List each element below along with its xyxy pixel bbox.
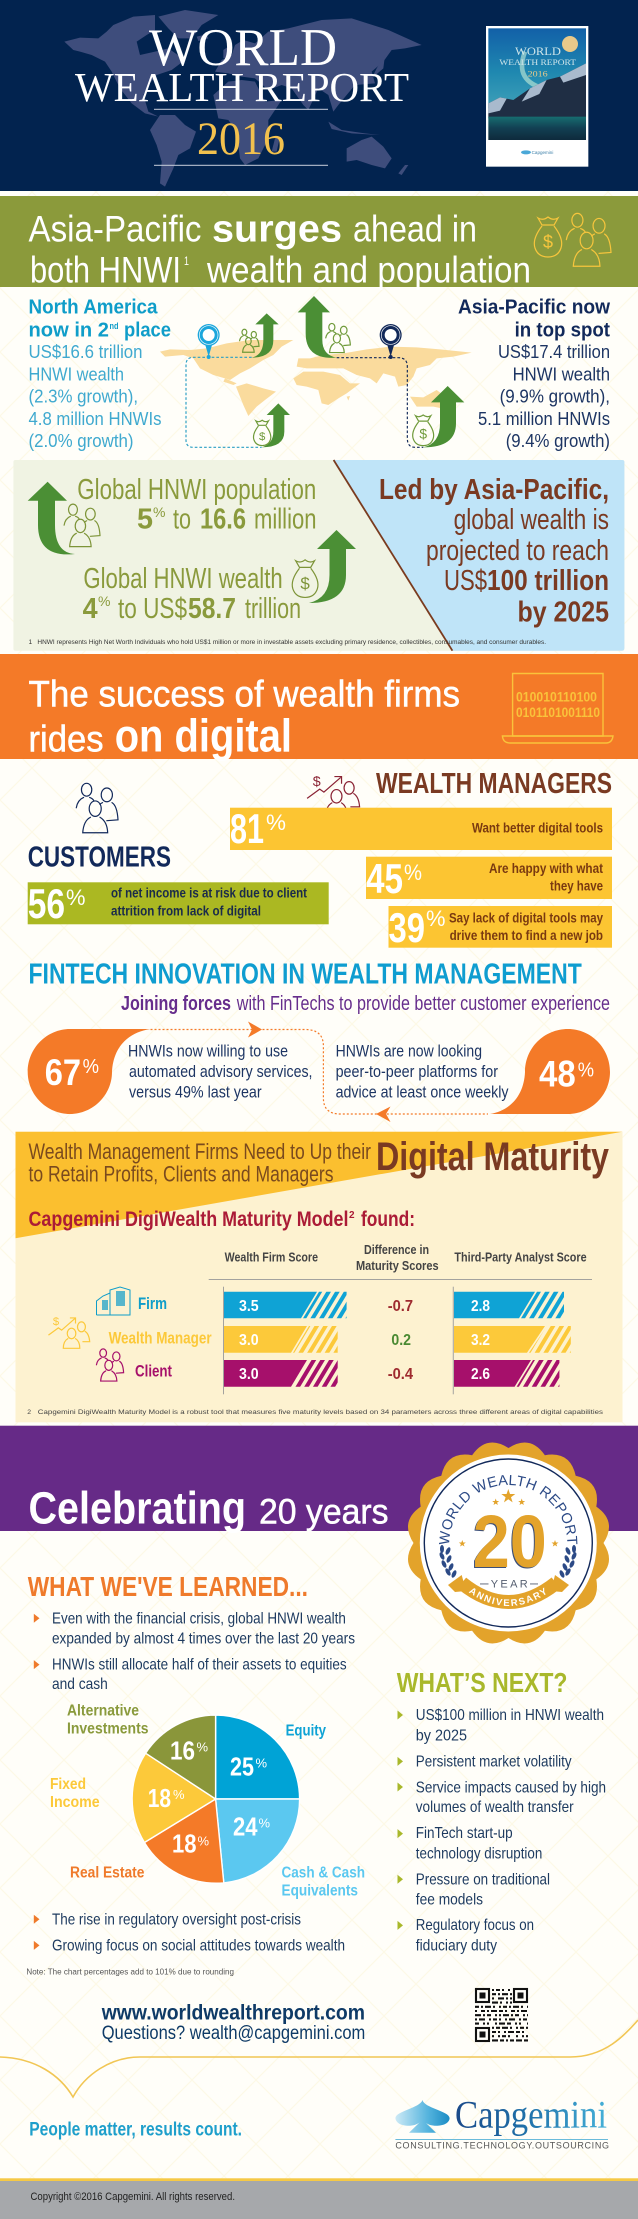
list: Pressure on traditional	[416, 1871, 550, 1888]
bullets bottom: The rise in regulatory oversight post-crisis	[52, 1912, 301, 1929]
score bars: analyst: 2.6	[471, 1366, 490, 1383]
global wealth stat: 58.7	[188, 593, 236, 625]
bullets top	[34, 1611, 355, 1693]
row labels: Client	[135, 1362, 172, 1381]
heading: Asia-Pacific surges	[28, 208, 531, 291]
heading: digital: The success of wealth firms	[28, 673, 460, 715]
Capgemini logo	[395, 2093, 609, 2150]
pie labels: Fixed	[50, 1776, 86, 1793]
ribbon: ANNIVERSARY	[468, 1588, 546, 1606]
pie labels	[50, 1703, 365, 1899]
list: Persistent market volatility	[416, 1753, 572, 1770]
icon: people	[64, 504, 100, 547]
icon: money and people	[534, 213, 611, 266]
North America text block: US$16.6 trillion	[28, 341, 142, 362]
footnote 1: 1	[28, 639, 32, 646]
title	[75, 19, 409, 166]
contact text	[101, 2001, 365, 2044]
dotted connector	[150, 1030, 488, 1114]
arrow left	[376, 1106, 390, 1122]
global wealth stat: to US$	[118, 593, 187, 625]
report cover: 2016	[528, 69, 548, 79]
stat bar 56%: 56	[28, 880, 65, 927]
year label	[480, 1579, 538, 1591]
icon: wealth manager	[307, 774, 360, 815]
heading: digital maturity: Wealth Management Firms Need to Up their	[28, 1139, 371, 1164]
icon: laptop with binary: 010010110100	[516, 690, 597, 705]
anniversary badge	[408, 1442, 609, 1644]
Capgemini logo: Capgemini	[455, 2093, 607, 2136]
list	[398, 1707, 606, 1955]
projection text	[379, 474, 609, 629]
year label: YEAR	[491, 1579, 528, 1591]
projection text: by 2025	[518, 597, 609, 629]
pie chart: %	[258, 1816, 270, 1830]
dotted connectors	[186, 357, 423, 447]
header banner	[0, 0, 638, 191]
heading: digital maturity	[28, 1135, 610, 1187]
stat bar 81%: %	[266, 810, 286, 835]
stat bar 45%: 45	[366, 855, 403, 902]
list: US$100 million in HNWI wealth	[416, 1707, 604, 1724]
global wealth stat	[83, 563, 301, 625]
report cover	[486, 26, 588, 167]
subheading: model: found:	[361, 1208, 415, 1231]
score bars: analyst: 2.8	[471, 1298, 490, 1315]
North America text block: place	[124, 320, 171, 342]
North America text block: now in 2	[28, 320, 109, 342]
heading: WHAT’S NEXT?	[397, 1667, 568, 1698]
maturity differences: 0.2	[391, 1332, 411, 1349]
callout 48%: advice at least once weekly	[336, 1084, 509, 1102]
pie labels: Income	[50, 1794, 100, 1811]
chart note: Note: The chart percentages add to 101% due to rounding	[26, 1968, 234, 1977]
arrow: wealth up	[309, 530, 356, 603]
icon: laptop with binary: 0101101001110	[516, 705, 600, 720]
callout 48%: peer-to-peer platforms for	[336, 1063, 498, 1081]
anniversary badge: WORLD WEALTH REPORT	[438, 1475, 578, 1544]
stat bar 39%: 39	[388, 904, 425, 951]
table headers: Maturity Scores	[356, 1258, 439, 1273]
gold divider curve	[0, 2020, 638, 2097]
heading: fintech innovation: Joining forces	[121, 993, 231, 1015]
bullets top: HNWIs still allocate half of their assets to equities	[52, 1656, 347, 1673]
projection text: US$	[444, 565, 487, 597]
heading: celebrating	[28, 1483, 388, 1534]
callout 48%	[336, 1029, 610, 1114]
footnote 2: Capgemini DigiWealth Maturity Model is a robust tool that measures five maturity levels based on 34 parameters across three different areas of digital capabilities	[38, 1409, 604, 1416]
heading: Asia-Pacific surges: Asia-Pacific	[28, 208, 202, 250]
footnote 1: HNWI represents High Net Worth Individuals who hold US$1 million or more in investable assets excluding primary residence, collectibles, consumables, and consumer durables.	[37, 639, 546, 646]
list: fiduciary duty	[416, 1938, 497, 1955]
list: Regulatory focus on	[416, 1917, 534, 1934]
stat bar 39%: drive them to find a new job	[450, 927, 603, 943]
score bars: wealth firm: 3.0	[239, 1366, 259, 1383]
pin: Asia-Pacific	[380, 324, 402, 359]
icon: money bag	[292, 560, 318, 597]
bullets top: expanded by almost 4 times over the last 20 years	[52, 1631, 355, 1648]
maturity differences	[388, 1298, 413, 1383]
heading: celebrating: Celebrating	[28, 1483, 246, 1534]
stat bar 45%: Are happy with what	[489, 860, 603, 876]
title: 2016	[197, 113, 285, 165]
heading: fintech innovation	[28, 958, 610, 1015]
wealth managers block	[230, 768, 612, 951]
table headers: Difference in	[364, 1242, 429, 1257]
callout 48%: HNWIs are now looking	[336, 1043, 482, 1061]
pie chart: 18	[148, 1783, 171, 1813]
stat bar 45%: they have	[550, 878, 603, 894]
icon: firm buildings	[96, 1287, 130, 1315]
list: Service impacts caused by high	[416, 1780, 606, 1796]
icons on map	[240, 323, 434, 446]
list: volumes of wealth transfer	[416, 1799, 574, 1816]
heading: digital maturity: to Retain Profits, Clients and Managers	[28, 1162, 334, 1187]
pie chart: %	[198, 1833, 210, 1848]
pie chart: %	[256, 1756, 268, 1770]
heading: customers: CUSTOMERS	[28, 842, 171, 874]
Asia-Pacific text block: HNWI wealth	[513, 364, 610, 385]
stat bar 56%: %	[66, 885, 86, 910]
score bars: wealth firm	[224, 1292, 347, 1387]
icon: client	[96, 1349, 124, 1381]
contact text: Questions? wealth@capgemini.com	[102, 2023, 365, 2044]
North America text block: (2.0% growth)	[28, 430, 134, 451]
Asia-Pacific text block: (9.9% growth),	[500, 386, 610, 407]
Asia-Pacific text block: Asia-Pacific now	[458, 296, 610, 318]
heading: digital	[28, 673, 460, 762]
projection text: 100 trillion	[487, 565, 609, 597]
callout 67%: versus 49% last year	[129, 1084, 262, 1102]
North America text block: nd	[110, 321, 119, 332]
pie labels: Equity	[286, 1722, 326, 1739]
Capgemini logo: CONSULTING.TECHNOLOGY.OUTSOURCING	[395, 2140, 609, 2150]
what's next	[397, 1667, 606, 1955]
maturity differences: -0.4	[388, 1366, 413, 1383]
footnote 2: 2	[27, 1409, 31, 1416]
title: WORLD	[149, 19, 337, 77]
global population stat: million	[254, 503, 316, 535]
bullets bottom	[34, 1912, 345, 1955]
Asia-Pacific text block: in top spot	[515, 320, 610, 342]
table headers: Third-Party Analyst Score	[454, 1250, 587, 1265]
ribbon	[448, 1575, 569, 1609]
Asia-Pacific text block: 5.1 million HNWIs	[478, 408, 610, 429]
world map with growth arrows	[160, 296, 472, 447]
list: technology disruption	[416, 1846, 542, 1863]
title: WEALTH REPORT	[75, 64, 409, 110]
what we've learned	[26, 1571, 365, 1977]
global population stat: Global HNWI population	[77, 474, 316, 506]
subheading: model: Capgemini DigiWealth Maturity Model	[28, 1208, 348, 1231]
footer bar	[0, 2178, 638, 2219]
stat bar 81%: 81	[230, 805, 264, 852]
heading: Asia-Pacific surges: ahead in	[353, 208, 477, 250]
pie chart	[132, 1715, 300, 1883]
customers block	[28, 783, 329, 927]
global wealth stat: trillion	[245, 593, 301, 625]
stat bar 56%: attrition from lack of digital	[111, 903, 261, 919]
heading: digital: on digital	[115, 710, 292, 762]
table headers: Wealth Firm Score	[225, 1250, 318, 1265]
icon: customers	[76, 783, 118, 833]
stat bar 45%	[366, 855, 612, 902]
stat bar 81%: Want better digital tools	[472, 820, 603, 836]
map	[160, 340, 472, 416]
green section banner	[0, 196, 638, 291]
QR code	[475, 1989, 528, 2041]
callout 48%: 48	[539, 1054, 576, 1095]
arrow right	[248, 1022, 262, 1038]
callout 67%: HNWIs now willing to use	[128, 1043, 288, 1061]
North America text block: HNWI wealth	[28, 364, 124, 385]
footer bar: Copyright ©2016 Capgemini. All rights reserved.	[30, 2191, 235, 2203]
row labels	[48, 1287, 212, 1381]
score bars: wealth firm: 3.0	[239, 1332, 259, 1349]
pie labels: Investments	[67, 1721, 149, 1738]
report cover: WEALTH REPORT	[499, 58, 576, 67]
North America text block	[28, 296, 171, 451]
panel: global HNWI figures	[13, 460, 624, 651]
global population stat: 16.6	[200, 503, 246, 535]
heading: celebrating: 20 years	[259, 1493, 388, 1532]
Asia-Pacific text block: US$17.4 trillion	[498, 341, 610, 362]
global wealth stat: 4	[83, 593, 98, 625]
laurels	[438, 1545, 578, 1578]
table headers	[225, 1242, 587, 1273]
pie labels: Real Estate	[70, 1864, 144, 1882]
global population stat: 5	[137, 503, 153, 535]
score bars: wealth firm: 3.5	[239, 1298, 259, 1315]
tagline: People matter, results count.	[29, 2120, 242, 2141]
arrow: population up	[28, 482, 75, 554]
stat bar 81%	[230, 805, 612, 852]
purple section banner	[0, 1426, 638, 1534]
global population stat: %	[153, 504, 165, 520]
score bars: analyst	[454, 1292, 571, 1387]
heading: Asia-Pacific surges: both HNWI	[30, 249, 181, 291]
world map backdrop	[64, 10, 422, 187]
row labels: Wealth Manager	[109, 1328, 212, 1347]
callout 67%: automated advisory services,	[129, 1063, 312, 1081]
callout 67%: 67	[45, 1052, 81, 1093]
callout 67%	[28, 1029, 312, 1114]
stat bar 39%	[388, 904, 612, 951]
fintech callouts	[28, 1022, 610, 1122]
icon: wealth manager	[48, 1316, 90, 1348]
pie chart: 18	[172, 1828, 196, 1858]
stat bar 45%: %	[404, 860, 422, 885]
pie chart: 24	[233, 1811, 258, 1841]
global population stat: to	[173, 503, 191, 535]
subheading: model: 2	[349, 1210, 355, 1221]
pie chart: 16	[170, 1735, 195, 1765]
panel: digital maturity	[16, 1132, 622, 1422]
pie chart: %	[173, 1787, 185, 1802]
stat bar 39%: %	[426, 906, 446, 931]
arrows	[252, 296, 464, 447]
callout 48%: %	[578, 1060, 594, 1082]
bullets bottom: Growing focus on social attitudes towards wealth	[52, 1938, 345, 1955]
stars	[459, 1489, 558, 1546]
Asia-Pacific text block	[458, 296, 610, 451]
list: fee models	[416, 1891, 483, 1908]
list: by 2025	[416, 1728, 467, 1745]
score bars: analyst: 3.2	[471, 1332, 490, 1349]
orange section banner	[0, 654, 638, 762]
icon: laptop with binary	[502, 674, 613, 743]
pie labels: Cash & Cash	[282, 1864, 365, 1882]
report cover: Capgemini	[532, 150, 553, 156]
global wealth stat: Global HNWI wealth	[83, 563, 283, 595]
bullets top: Even with the financial crisis, global HNWI wealth	[52, 1611, 346, 1628]
contact text: www.worldwealthreport.com	[101, 2001, 365, 2024]
list: FinTech start-up	[416, 1825, 513, 1842]
heading: Asia-Pacific surges: surges	[212, 209, 342, 251]
stat bar 56%: of net income is at risk due to client	[111, 885, 307, 901]
heading: Asia-Pacific surges: 1	[184, 254, 189, 268]
Asia-Pacific text block: (9.4% growth)	[506, 430, 610, 451]
callout 67%: %	[83, 1056, 99, 1078]
global population stat	[77, 474, 316, 535]
stat bar 56%	[28, 880, 329, 927]
row labels: Firm	[138, 1294, 167, 1313]
report cover: WORLD	[515, 46, 561, 58]
heading: Asia-Pacific surges: wealth and population	[206, 249, 531, 291]
number 20: 20	[472, 1501, 546, 1584]
North America text block: (2.3% growth),	[28, 386, 138, 407]
pie chart: %	[196, 1739, 208, 1754]
number 20: 20	[473, 1500, 547, 1583]
bullets top: and cash	[52, 1676, 108, 1693]
maturity differences: -0.7	[388, 1298, 413, 1315]
North America text block: North America	[28, 296, 158, 318]
pie labels: Alternative	[67, 1703, 139, 1720]
stat bar 39%: Say lack of digital tools may	[449, 910, 603, 926]
pie chart: 25	[230, 1752, 254, 1782]
heading: digital: rides	[28, 718, 104, 760]
heading: WHAT WE'VE LEARNED...	[28, 1571, 308, 1602]
pie labels: Equivalents	[282, 1882, 358, 1899]
pin: North America	[198, 324, 220, 359]
global wealth stat: %	[98, 593, 110, 609]
North America text block: 4.8 million HNWIs	[28, 408, 162, 429]
